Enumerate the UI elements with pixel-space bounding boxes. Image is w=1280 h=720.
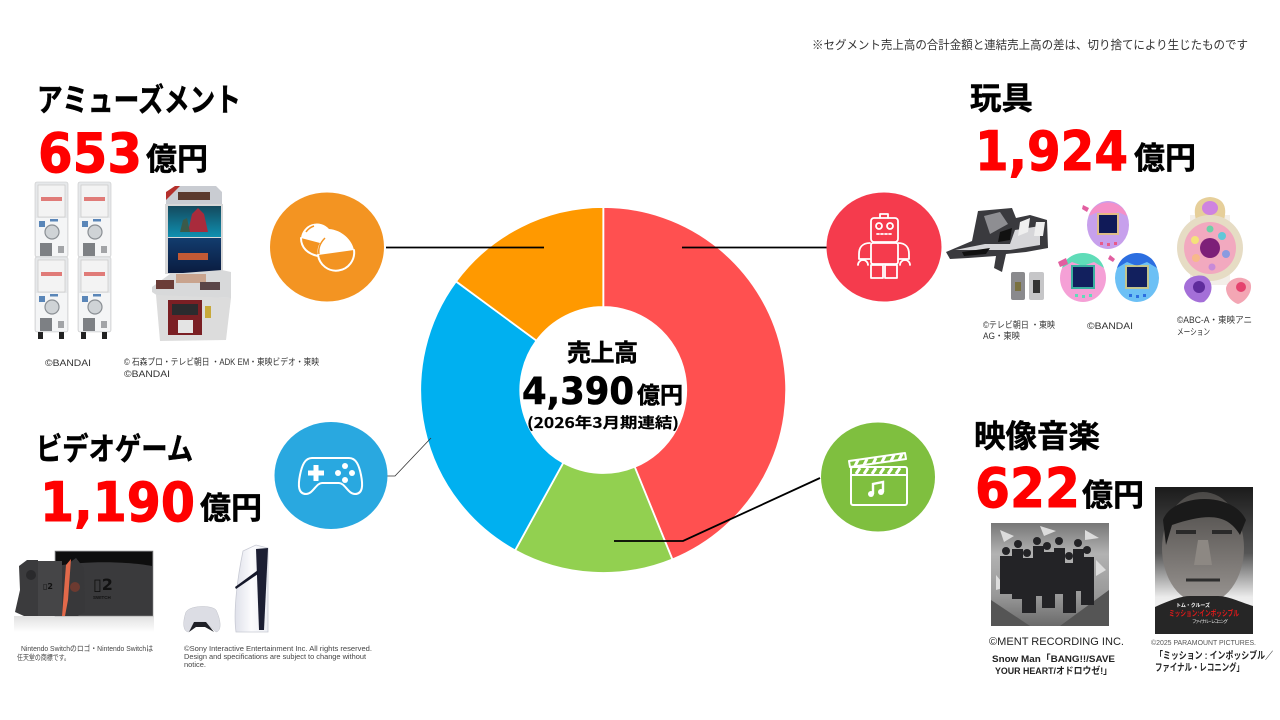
credit: robot toy	[983, 319, 1055, 341]
segment: video games	[420, 281, 563, 550]
credit: arcade cabinet: ©BANDAI	[124, 369, 170, 379]
image: arcade cabinet	[152, 186, 231, 341]
image: movie poster	[1155, 487, 1253, 634]
center total label: 売上高	[567, 333, 638, 368]
credit: capsule machines: ©BANDAI	[45, 358, 91, 368]
credit: virtual pets: ©BANDAI	[1087, 321, 1133, 331]
value: amusement	[38, 122, 208, 185]
center total label: 4,390	[522, 370, 634, 413]
value: video and music: 億円	[1082, 470, 1144, 515]
value: toys: 1,924	[975, 120, 1128, 183]
credit: game console	[17, 643, 153, 662]
value: video games: 1,190	[40, 471, 195, 534]
credit: robot toy: ©テレビ朝日 ・東映	[983, 319, 1055, 330]
credit: PlayStation: notice.	[184, 660, 206, 669]
credit: watch toy: ©ABC-A・東映アニ	[1177, 314, 1252, 325]
image: movie poster: ミッション:インポッシブル	[1169, 608, 1239, 618]
credit: PlayStation: ©Sony Interactive Entertainment Inc. All rights reserved.	[184, 644, 372, 653]
leader line: video and music	[614, 478, 820, 541]
image: game console with dock: SWITCH	[93, 595, 111, 600]
value: video games: 億円	[200, 483, 262, 528]
footnote: ※セグメント売上高の合計金額と連結売上高の差は、切り捨てにより生じたものです	[812, 37, 1248, 52]
heading: video and music: 映像音楽	[974, 411, 1100, 457]
credit: movie: ©2025 PARAMOUNT PICTURES.	[1151, 638, 1256, 647]
leader line: toys	[682, 246, 828, 248]
value: video and music	[975, 457, 1144, 520]
image: robot toy	[946, 208, 1048, 300]
credit: arcade cabinet: © 石森プロ・テレビ朝日 ・ADK EM・東映ビデオ・東映	[124, 356, 319, 367]
caption: movie title: ファイナル・レコニング」	[1155, 661, 1244, 674]
center total label: (2026年3月期連結)	[527, 412, 679, 433]
image: magical watch toy	[1177, 197, 1251, 304]
image: game console with dock: ▯2	[43, 582, 53, 591]
caption: album title	[992, 653, 1115, 677]
image: capsule toy machines	[35, 182, 111, 339]
image: game console with dock: ▯2	[93, 575, 113, 594]
image: movie poster: トム・クルーズ	[1176, 602, 1210, 609]
panel: amusement	[35, 75, 319, 379]
image: Snow Man album cover	[991, 523, 1109, 626]
panel: video games	[14, 424, 372, 669]
center total label: 億円	[637, 376, 683, 410]
leader line: video games	[387, 438, 431, 476]
heading: toys: 玩具	[970, 73, 1033, 119]
leader line: amusement	[386, 246, 544, 248]
credit: arcade cabinet	[124, 356, 319, 379]
caption: album title: YOUR HEART/オドロウゼ!」	[995, 665, 1112, 677]
icon: game controller	[274, 422, 388, 529]
donut chart	[420, 207, 786, 573]
segment: amusement	[456, 207, 603, 341]
credit: robot toy: AG・東映	[983, 330, 1020, 341]
icon: clapperboard with note	[821, 422, 935, 532]
image: egg-shaped virtual pets	[1058, 201, 1159, 302]
caption: movie title	[1155, 649, 1273, 674]
value: toys: 億円	[1134, 133, 1196, 178]
segment: video and music	[515, 463, 672, 573]
panel: video and music	[974, 411, 1273, 677]
segment: toys	[603, 207, 786, 559]
icon: robot	[826, 192, 942, 302]
center total label	[522, 333, 683, 433]
credit: game console: Nintendo Switchのロゴ・Nintendo Switchは	[21, 643, 153, 653]
credit: watch toy	[1177, 314, 1252, 337]
credit: PlayStation	[184, 644, 372, 669]
icon: amusement capsules	[270, 192, 384, 302]
credit: PlayStation: Design and specifications are subject to change without	[184, 652, 367, 661]
image: movie poster: ファイナル・レコニング	[1192, 618, 1228, 625]
credit: watch toy: メーション	[1177, 327, 1210, 337]
credit: game console: 任天堂の商標です。	[17, 652, 70, 662]
image: game console with dock	[14, 551, 154, 632]
panel: toys	[946, 73, 1252, 341]
heading: amusement: アミューズメント	[37, 75, 241, 121]
value: video and music: 622	[975, 457, 1080, 520]
value: amusement: 億円	[146, 134, 208, 179]
heading: video games: ビデオゲーム	[36, 424, 193, 469]
value: amusement: 653	[38, 122, 142, 185]
image: PlayStation console and controller	[184, 545, 268, 632]
credit: album: ©MENT RECORDING INC.	[989, 636, 1124, 648]
caption: album title: Snow Man「BANG!!/SAVE	[992, 653, 1115, 665]
